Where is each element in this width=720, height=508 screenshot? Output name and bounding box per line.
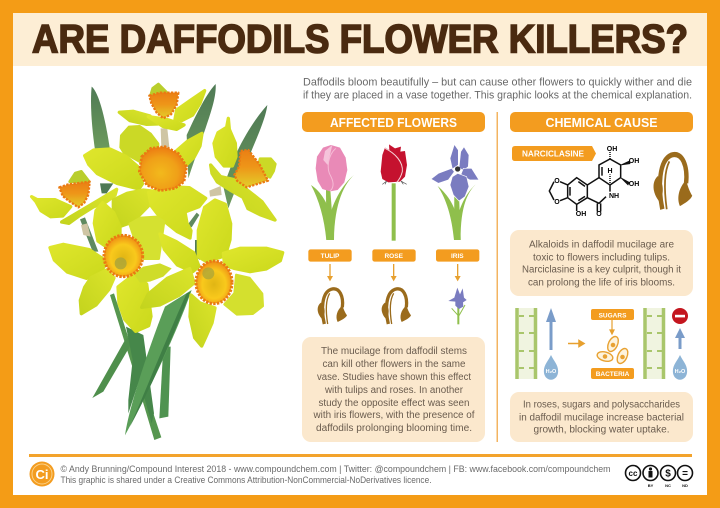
intro text <box>303 76 692 102</box>
leaves and stems <box>80 84 267 440</box>
text box: sugars: in daffodil mucilage increase bacterial <box>519 412 684 424</box>
panel: chemical cause <box>510 112 693 442</box>
chemical structure: narciclasine: OH <box>607 146 617 153</box>
label: tulip <box>308 249 352 262</box>
icon: iris <box>431 144 479 240</box>
chemical structure: narciclasine: H <box>607 168 613 175</box>
text box: alkaloids: toxic to flowers including tulips. <box>533 252 670 264</box>
icon: water drop blocked: H₂O <box>675 369 686 375</box>
heading: chemical cause <box>510 112 693 132</box>
text box: sugars <box>510 392 693 442</box>
title band <box>13 13 707 66</box>
flower: left <box>32 171 117 223</box>
credit text: © Andy Brunning/Compound Interest 2018 - www.compoundchem.com | Twitter: @compoundchem | FB: www.facebook.com/compoundchem <box>60 464 611 475</box>
stem tube: healthy <box>517 308 536 379</box>
heading: affected flowers <box>302 112 485 132</box>
licence icons: cc <box>629 469 638 478</box>
text box: mucilage: The mucilage from daffodil stems <box>321 346 467 357</box>
stem tube: blocked <box>645 308 664 379</box>
flower labels text <box>321 253 464 260</box>
illustration: daffodil bouquet <box>32 84 283 440</box>
icon: water drop blocked <box>673 355 687 380</box>
label: rose <box>372 249 416 262</box>
text box: sugars: In roses, sugars and polysaccharides <box>523 400 680 410</box>
arrow: water flow <box>546 308 556 350</box>
icon: water drop <box>544 355 558 380</box>
icon: wilted tulip <box>318 289 347 324</box>
chemical structure: narciclasine: O <box>554 178 560 185</box>
text box: mucilage <box>302 337 485 442</box>
diagram: water uptake <box>517 308 688 380</box>
chemical structure: narciclasine <box>549 146 639 218</box>
label: sugars: SUGARS <box>599 312 627 320</box>
licence icons <box>626 466 692 488</box>
text box: alkaloids: Alkaloids in daffodil mucilage are <box>529 240 674 250</box>
licence icons: NC <box>665 483 671 488</box>
chemical structure: narciclasine: OH <box>629 158 639 165</box>
flower: centre <box>85 126 206 238</box>
flower: top <box>119 84 205 129</box>
text box: mucilage: study the opposite effect was seen <box>318 398 470 409</box>
text box: alkaloids: can prolong the life of iris blooms. <box>528 278 675 288</box>
flower labels text: IRIS <box>451 253 464 260</box>
label: sugars <box>591 309 634 320</box>
flower labels text: ROSE <box>384 253 404 260</box>
licence icons: ND <box>682 483 688 488</box>
icon: wilted rose <box>382 289 411 324</box>
licence icons: = <box>682 468 688 480</box>
chemical structure: narciclasine: NH <box>609 193 619 200</box>
flower: lower left <box>50 203 172 331</box>
text box: mucilage: can kill other flowers in the same <box>322 359 466 370</box>
panel: affected flowers <box>302 112 485 442</box>
icon: small iris <box>448 288 467 324</box>
text box: alkaloids <box>510 230 693 296</box>
text box: sugars: growth, blocking water uptake. <box>534 424 670 436</box>
icon: rose <box>381 144 407 241</box>
flower labels text: TULIP <box>321 253 340 260</box>
label: bacteria <box>591 368 634 379</box>
icon: blocked sign <box>672 308 688 324</box>
label: narciclasine: NARCICLASINE <box>522 150 585 158</box>
icon: bacteria <box>596 335 630 365</box>
text box: mucilage: with tulips and roses. In another <box>324 385 464 396</box>
text box: mucilage: with iris flowers, with the presence of <box>313 410 475 421</box>
chemical structure: narciclasine: O <box>554 199 560 206</box>
intro text: Daffodils bloom beautifully – but can cause other flowers to quickly wither and die <box>303 76 692 88</box>
arrow: reduced water flow <box>675 328 685 349</box>
licence icons: $ <box>665 468 671 480</box>
flower: lower right <box>142 200 283 346</box>
icon: wilted flower <box>653 154 692 209</box>
label: bacteria: BACTERIA <box>596 371 630 378</box>
intro text: if they are placed in a vase together. This graphic looks at the chemical explanation. <box>303 90 692 102</box>
footer <box>30 462 692 488</box>
logo: Ci <box>36 467 48 482</box>
chemical structure: narciclasine: OH <box>629 181 639 188</box>
text box: mucilage: daffodils prolonging blooming time. <box>316 423 472 434</box>
arrows <box>327 264 461 281</box>
heading: affected flowers: AFFECTED FLOWERS <box>330 115 457 130</box>
label: narciclasine <box>512 146 596 161</box>
flowers diagram <box>308 144 479 324</box>
licence icons: BY <box>648 483 654 488</box>
text box: mucilage: vase. Studies have shown this effect <box>317 372 471 383</box>
credit text <box>60 464 611 486</box>
icon: water drop: H₂O <box>546 369 557 375</box>
chemical structure: narciclasine: O <box>596 211 602 218</box>
flower: right <box>211 118 275 220</box>
arrow: process <box>568 340 584 346</box>
credit text: This graphic is shared under a Creative Commons Attribution-NonCommercial-NoDerivatives licence. <box>60 475 432 486</box>
heading: chemical cause: CHEMICAL CAUSE <box>546 115 658 130</box>
arrow: sugars to bacteria <box>610 320 614 334</box>
text box: alkaloids: Narciclasine is a key culprit, though it <box>522 264 681 276</box>
label: iris <box>436 249 479 262</box>
logo <box>30 462 54 486</box>
icon: tulip <box>311 145 354 240</box>
chemical structure: narciclasine: OH <box>576 211 586 218</box>
